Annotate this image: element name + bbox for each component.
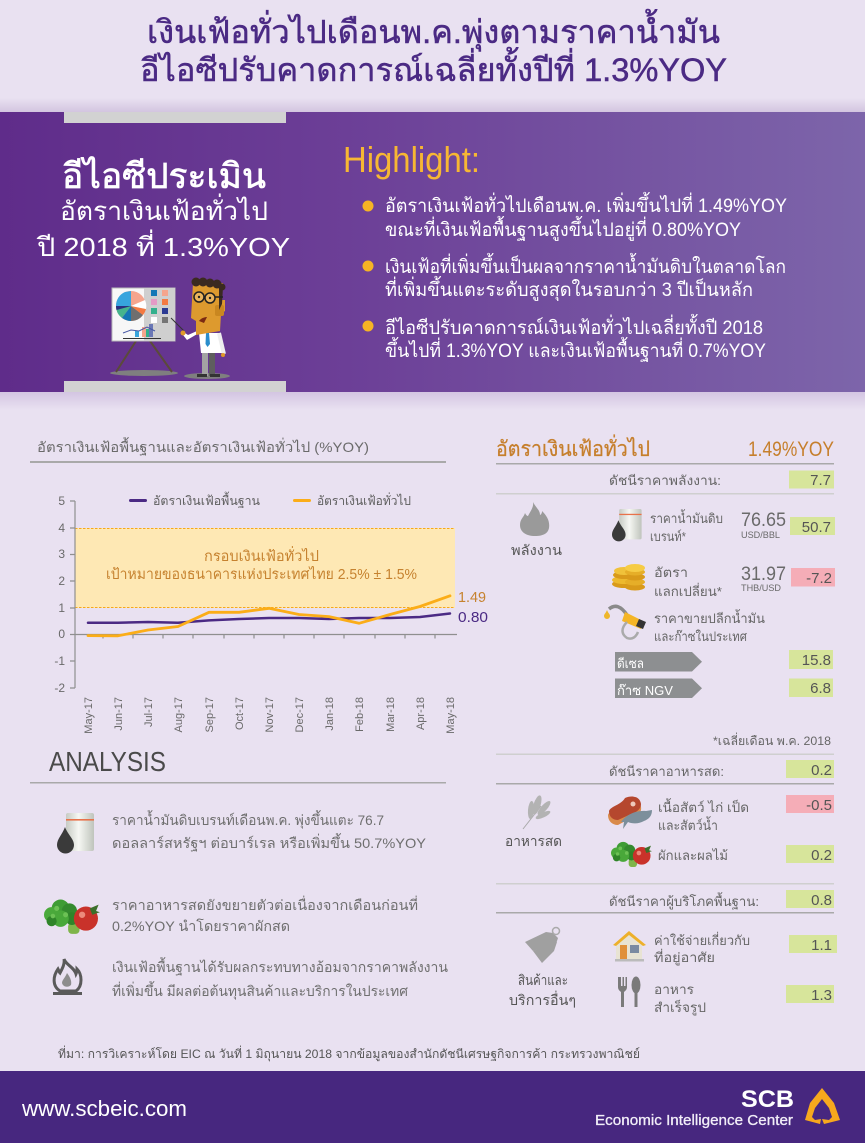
footer — [0, 1071, 865, 1143]
icon: presenter with chart board — [110, 278, 230, 379]
analysis text: fresh food — [112, 896, 418, 934]
row: Brent crude: USD/BBL — [741, 530, 780, 541]
row: housing: ค่าใช้จ่ายเกี่ยวกับ — [654, 932, 750, 948]
row: NGV — [615, 678, 833, 698]
logo text: SCB — [741, 1086, 794, 1113]
row: fresh food index: 0.2 — [811, 762, 832, 779]
axes — [70, 501, 457, 688]
y axis labels: -2 — [54, 681, 65, 695]
icon: wheat — [523, 794, 552, 829]
x axis labels — [83, 697, 457, 734]
logo text — [595, 1086, 794, 1129]
legend: อัตราเงินเฟ้อพื้นฐาน — [153, 491, 260, 508]
y axis labels: 1 — [58, 601, 65, 615]
x axis labels: Feb-18 — [354, 697, 366, 732]
row: exchange rate: อัตรา — [654, 565, 688, 580]
highlight bullet 1 — [362, 192, 787, 241]
row: diesel: 15.8 — [802, 652, 831, 669]
row: Brent crude: 50.7 — [802, 519, 831, 536]
icon: fuel nozzle — [604, 606, 646, 639]
label: goods and services — [509, 972, 576, 1008]
heading: analysis: ANALYSIS — [49, 746, 166, 777]
y axis labels — [54, 494, 65, 695]
row: core index: ดัชนีราคาผู้บริโภคพื้นฐาน: — [609, 892, 759, 910]
x axis labels: May-18 — [445, 697, 457, 734]
analysis text: oil: ราคาน้ำมันดิบเบรนท์เดือนพ.ค. พุ่งขึ้นแตะ 76.7 — [112, 810, 384, 829]
row: exchange rate: แลกเปลี่ยน* — [654, 583, 722, 599]
analysis text: oil: ดอลลาร์สหรัฐฯ ต่อบาร์เรล หรือเพิ่มขึ้น 50.7%YOY — [112, 833, 427, 852]
y axis labels: 3 — [58, 547, 65, 561]
x axis labels: Jan-18 — [324, 697, 336, 731]
target band: กรอบเงินเฟ้อทั่วไป — [204, 546, 319, 565]
highlight bullet 2 — [362, 253, 786, 302]
x axis labels: Nov-17 — [264, 697, 276, 732]
row: housing — [654, 932, 837, 966]
x axis labels: Apr-18 — [415, 697, 427, 730]
x axis labels: Dec-17 — [294, 697, 306, 732]
heading: EIC assessment — [36, 156, 290, 262]
y axis labels: 5 — [58, 494, 65, 508]
x axis labels: Aug-17 — [173, 697, 185, 732]
title line 2: อีไอซีปรับคาดการณ์เฉลี่ยทั้งปีที่ 1.3%YOY — [140, 47, 727, 88]
icon: oil barrel small — [612, 509, 642, 541]
highlight bullet 1: อัตราเงินเฟ้อทั่วไปเดือนพ.ค. เพิ่มขึ้นไปที่ 1.49%YOY — [385, 192, 787, 217]
icon: oil barrel — [57, 813, 94, 854]
analysis text: fresh food: 0.2%YOY นำโดยราคาผักสด — [112, 918, 290, 934]
target band — [75, 528, 455, 608]
highlight bullet 2: เงินเฟ้อที่เพิ่มขึ้นเป็นผลจากราคาน้ำมันดิบในตลาดโลก — [385, 253, 786, 278]
row: prepared food: 1.3 — [811, 987, 832, 1004]
row: exchange rate: -7.2 — [806, 570, 832, 587]
highlight bullet 2: ที่เพิ่มขึ้นแตะระดับสูงสุดในรอบกว่า 3 ปีเป็นหลัก — [385, 276, 753, 302]
row: diesel: ดีเซล — [617, 656, 644, 671]
row: prepared food — [654, 982, 834, 1016]
icon: vegetables — [44, 900, 100, 934]
row: exchange rate: 31.97 — [741, 564, 786, 585]
row: energy index — [496, 470, 834, 494]
row: Brent crude: ราคาน้ำมันดิบ — [650, 509, 723, 526]
highlight bullet 1: ขณะที่เงินเฟ้อพื้นฐานสูงขึ้นไปอยู่ที่ 0.80%YOY — [385, 216, 741, 241]
row: core index: 0.8 — [811, 892, 832, 909]
row: prepared food: อาหาร — [654, 982, 694, 997]
analysis text: core inflation — [112, 957, 448, 1000]
x axis labels: Oct-17 — [234, 697, 246, 730]
row: meat: -0.5 — [806, 797, 832, 814]
row: meat: และสัตว์น้ำ — [658, 816, 718, 833]
shadow under band — [0, 392, 865, 410]
y axis labels: 0 — [58, 627, 65, 641]
analysis text: oil — [112, 810, 427, 852]
analysis text: core inflation: เงินเฟ้อพื้นฐานได้รับผลกระทบทางอ้อมจากราคาพลังงาน — [112, 957, 448, 976]
highlight bullet 3: ขึ้นไปที่ 1.3%YOY และเงินเฟ้อพื้นฐานที่ 0.7%YOY — [385, 337, 766, 362]
row: core index — [496, 890, 834, 914]
icon: price tags — [525, 928, 560, 963]
legend — [129, 491, 411, 508]
row: Brent crude: เบรนท์* — [650, 529, 686, 544]
row: fresh food index — [496, 760, 834, 784]
row: vegetables: 0.2 — [811, 847, 832, 864]
label: goods and services: สินค้าและ — [518, 972, 568, 988]
row: meat — [658, 795, 834, 833]
heading: headline inflation: 1.49%YOY — [748, 438, 834, 461]
row: prepared food: สำเร็จรูป — [654, 998, 706, 1016]
heading: EIC assessment: อัตราเงินเฟ้อทั่วไป — [60, 193, 268, 226]
headline inflation line — [88, 596, 450, 636]
icon: coins — [612, 564, 645, 590]
analysis text: core inflation: ที่เพิ่มขึ้น มีผลต่อต้นทุนสินค้าและบริการในประเทศ — [112, 981, 408, 1000]
highlight bullet 3 — [362, 314, 766, 362]
row: diesel — [615, 650, 833, 672]
row: energy index: ดัชนีราคาพลังงาน: — [609, 473, 721, 488]
website: www.scbeic.com — [21, 1096, 187, 1121]
icon: flame outline — [53, 959, 82, 995]
core inflation line — [88, 614, 450, 623]
line chart: inflation — [54, 491, 488, 734]
target band: เป้าหมายของธนาคารแห่งประเทศไทย 2.5% ± 1.5% — [106, 565, 417, 583]
icon: SCB logo — [805, 1088, 840, 1124]
end value 1.49: 1.49 — [458, 589, 486, 606]
row: retail fuel: และก๊าซในประเทศ — [654, 629, 748, 644]
title line 1: เงินเฟ้อทั่วไปเดือนพ.ค.พุ่งตามราคาน้ำมัน — [147, 9, 720, 52]
end value 0.80: 0.80 — [458, 609, 488, 626]
x axis labels: Jun-17 — [113, 697, 125, 731]
logo text: Economic Intelligence Center — [595, 1112, 793, 1129]
row: NGV: ก๊าซ NGV — [617, 683, 673, 698]
panel: headline inflation table — [496, 434, 837, 1016]
highlight bullet 3: อีไอซีปรับคาดการณ์เงินเฟ้อทั่วไปเฉลี่ยทั้งปี 2018 — [385, 314, 763, 339]
panel: purple highlight band — [0, 112, 865, 392]
label: goods and services: บริการอื่นๆ — [509, 991, 576, 1008]
label: fresh food: อาหารสด — [505, 833, 562, 849]
heading: chart title: อัตราเงินเฟ้อพื้นฐานและอัตราเงินเฟ้อทั่วไป (%YOY) — [37, 437, 369, 456]
row: exchange rate: THB/USD — [741, 583, 781, 594]
row: vegetables: ผักและผลไม้ — [658, 848, 728, 863]
footnote: May 2018 average: *เฉลี่ยเดือน พ.ค. 2018 — [713, 732, 831, 748]
icon: fork and spoon — [618, 976, 640, 1007]
icon: vegetables small — [611, 842, 652, 867]
legend: อัตราเงินเฟ้อทั่วไป — [317, 492, 411, 508]
x axis labels: Mar-18 — [385, 697, 397, 732]
row: retail fuel — [654, 609, 765, 644]
y axis labels: 2 — [58, 574, 65, 588]
icon: meat and fish — [608, 796, 652, 829]
source note: ที่มา: การวิเคราะห์โดย EIC ณ วันที่ 1 มิถุนายน 2018 จากข้อมูลของสำนักดัชนีเศรษฐกิจการค้า กระทรวงพาณิชย์ — [58, 1045, 640, 1062]
heading: headline inflation: อัตราเงินเฟ้อทั่วไป — [496, 434, 650, 461]
row: fresh food index: ดัชนีราคาอาหารสด: — [609, 764, 724, 779]
row: Brent crude — [650, 509, 835, 544]
x axis labels: Sep-17 — [204, 697, 216, 732]
x axis labels: Jul-17 — [143, 697, 155, 727]
row: Brent crude: 76.65 — [741, 510, 786, 531]
icon: flame — [520, 502, 549, 536]
x axis labels: May-17 — [83, 697, 95, 734]
icon: house — [613, 931, 646, 962]
row: energy index: 7.7 — [810, 472, 831, 489]
heading: Highlight: Highlight: — [343, 139, 480, 180]
row: exchange rate — [654, 564, 835, 599]
row: vegetables — [658, 845, 834, 864]
heading: headline inflation — [496, 434, 834, 464]
row: meat: เนื้อสัตว์ ไก่ เป็ด — [658, 798, 749, 815]
heading: EIC assessment: ปี 2018 ที่ 1.3%YOY — [36, 229, 290, 262]
row: retail fuel: ราคาขายปลีกน้ำมัน — [654, 609, 765, 626]
analysis text: fresh food: ราคาอาหารสดยังขยายตัวต่อเนื่องจากเดือนก่อนที่ — [112, 896, 418, 913]
row: housing: ที่อยู่อาศัย — [654, 949, 715, 966]
label: energy: พลังงาน — [511, 542, 562, 558]
title panel — [0, 9, 865, 112]
row: NGV: 6.8 — [810, 680, 831, 697]
y axis labels: 4 — [58, 521, 65, 535]
row: housing: 1.1 — [811, 937, 832, 954]
y axis labels: -1 — [54, 654, 65, 668]
heading: EIC assessment: อีไอซีประเมิน — [62, 156, 266, 196]
